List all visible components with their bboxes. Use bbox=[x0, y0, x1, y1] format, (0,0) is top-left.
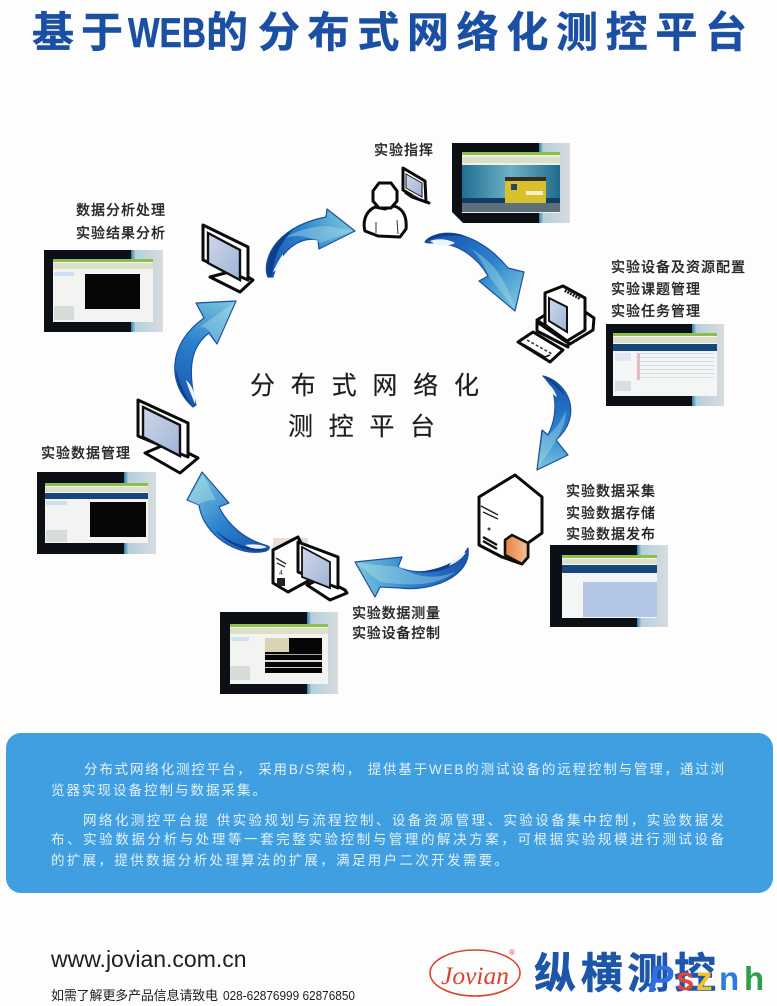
logo: Jovian ellipse: ® bbox=[509, 948, 515, 957]
screenshot: data store bbox=[550, 545, 668, 627]
description text bbox=[51, 761, 724, 868]
arrow: collection to measurement bbox=[355, 548, 468, 597]
screenshot: analysis bbox=[44, 250, 163, 332]
label: equipment config: 实验任务管理 bbox=[611, 303, 700, 319]
arrow: measurement to data management bbox=[187, 472, 269, 552]
label: data collection bbox=[566, 483, 655, 542]
label: data management: 实验数据管理 bbox=[41, 445, 130, 461]
label: data collection: 实验数据存储 bbox=[566, 505, 655, 521]
website url: www.jovian.com.cn bbox=[50, 946, 247, 972]
watermark: pSznh: s bbox=[676, 960, 694, 997]
title bbox=[32, 9, 747, 56]
watermark: pSznh: h bbox=[744, 960, 764, 997]
logo: Jovian ellipse bbox=[430, 948, 520, 996]
watermark: pSznh: z bbox=[696, 960, 712, 997]
screenshot: command login bbox=[452, 143, 570, 223]
label: data collection: 实验数据发布 bbox=[566, 526, 655, 542]
center heading: 分布式网络化 bbox=[250, 372, 479, 400]
label: data collection: 实验数据采集 bbox=[566, 483, 655, 499]
arrow: config to collection bbox=[537, 376, 571, 470]
title: 的 bbox=[206, 9, 248, 56]
screenshot: measurement bbox=[220, 612, 338, 694]
description text: 览器实现设备控制与数据采集。 bbox=[51, 782, 266, 798]
label: equipment config: 实验设备及资源配置 bbox=[611, 259, 745, 275]
icon: workstation with monitor: 4 bbox=[279, 570, 283, 577]
label: measurement: 实验设备控制 bbox=[352, 625, 440, 641]
panel: description bbox=[6, 733, 773, 893]
screenshot: data management bbox=[37, 472, 156, 554]
icon: person with monitor bbox=[364, 168, 429, 237]
label: measurement: 实验数据测量 bbox=[352, 605, 440, 621]
label: data analysis: 实验结果分析 bbox=[76, 225, 165, 241]
icon: workstation with monitor bbox=[273, 537, 347, 600]
description text: 分布式网络化测控平台， 采用B/S架构， 提供基于WEB的测试设备的远程控制与管理，通过浏 bbox=[84, 761, 724, 777]
title: WEB bbox=[128, 9, 206, 56]
center heading: 测控平台 bbox=[288, 413, 435, 441]
label: equipment config bbox=[611, 259, 745, 319]
title: 基于 bbox=[32, 9, 123, 56]
logo: brand name: 纵横测控 bbox=[534, 950, 716, 997]
screenshot: equipment config table bbox=[606, 324, 724, 406]
label: equipment config: 实验课题管理 bbox=[611, 281, 700, 297]
contact line: 如需了解更多产品信息请致电 bbox=[51, 988, 218, 1003]
description text: 布、实验数据分析与处理等一套完整实验控制与管理的解决方案，可根据实验规模进行测试设备 bbox=[51, 831, 724, 847]
icon: monitor left bbox=[138, 400, 198, 473]
label: measurement bbox=[352, 605, 440, 641]
arrow: analysis to command bbox=[266, 209, 355, 277]
watermark: pSznh: n bbox=[719, 960, 739, 997]
label: data analysis bbox=[76, 202, 165, 241]
watermark: pSznh bbox=[648, 959, 764, 1001]
icon: desktop computer with keyboard bbox=[518, 286, 594, 362]
label: data analysis: 数据分析处理 bbox=[76, 202, 165, 218]
icon: monitor top-left bbox=[203, 225, 253, 292]
logo: Jovian ellipse: Jovian bbox=[441, 963, 509, 990]
center heading bbox=[250, 372, 479, 441]
description text: 网络化测控平台提 供实验规划与流程控制、设备资源管理、实验设备集中控制，实验数据发 bbox=[83, 812, 724, 828]
watermark: pSznh: P bbox=[648, 959, 674, 1001]
title: 分布式网络化测控平台 bbox=[258, 9, 747, 56]
arrow: data management to analysis bbox=[175, 301, 236, 407]
icon: server bbox=[479, 475, 542, 564]
description text: 的扩展，提供数据分析处理算法的扩展，满足用户二次开发需要。 bbox=[51, 852, 508, 868]
arrow: command to equipment config bbox=[425, 233, 524, 311]
contact line bbox=[51, 988, 355, 1003]
contact line: 028-62876999 62876850 bbox=[223, 989, 355, 1003]
label: command: 实验指挥 bbox=[374, 142, 433, 158]
